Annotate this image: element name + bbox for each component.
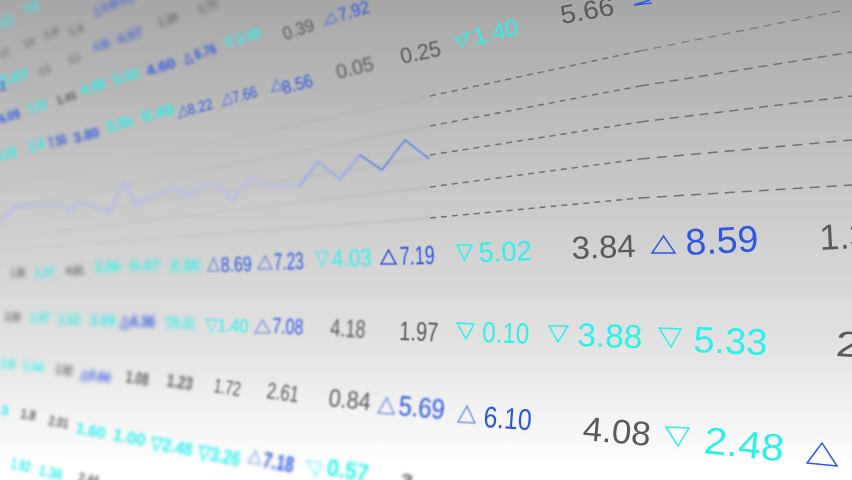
values near chart, mildly blurred: 8.56: [280, 71, 315, 98]
faint left guide lines: [0, 97, 430, 250]
bottom rows, blurred: 7.18: [261, 447, 296, 477]
row: values from 2.48 leftwards: 1.44: [22, 357, 45, 375]
top rows, distant and blurred: [0, 0, 220, 79]
row ending in 0.05, blurred part: [0, 66, 176, 165]
top rows, distant and blurred: 4.07: [115, 24, 144, 47]
row: values from 5.33 leftwards: [5, 309, 852, 365]
row ending in 1.40, blurred part: [0, 24, 262, 127]
top rows, distant and blurred: 1.6: [22, 36, 36, 51]
row: values from 5.33 leftwards: 1.52: [58, 311, 80, 329]
values near chart, mildly blurred: [179, 0, 376, 119]
row: values from 2.48 leftwards: 0.84: [327, 384, 372, 416]
row: values from 5.33 leftwards: 3.09: [90, 312, 115, 330]
row ending in 1.40, blurred part: 3.10: [26, 96, 49, 117]
row: values from 5.33 leftwards: △4.36: [119, 313, 156, 331]
top rows, distant and blurred: 1.9: [42, 25, 60, 42]
values near chart, mildly blurred: 0.05: [334, 53, 376, 84]
row: values from 2.48 leftwards: 1.92: [55, 360, 74, 379]
row: values from 2.48 leftwards: 6.10: [483, 401, 533, 437]
row ending in 0.05, blurred part: 7.50: [47, 131, 68, 151]
row: values from 2.48 leftwards: 5.69: [397, 390, 446, 425]
top rows, distant and blurred: 2.1: [67, 51, 82, 67]
top rows, distant and blurred: 4.66: [91, 35, 112, 55]
values near chart, mildly blurred: 0.39: [280, 15, 317, 44]
top rows, distant and blurred: 1.28: [156, 9, 180, 30]
top row values: [398, 0, 652, 69]
row: values from 8.59 leftwards: 8.59: [684, 218, 759, 263]
row ending in 1.40, blurred part: 1.45: [55, 88, 78, 108]
row: values from 8.59 leftwards: 8.69: [220, 253, 252, 277]
row: values from 8.59 leftwards: 5.02: [478, 235, 532, 268]
row: values from 8.59 leftwards: 4.81: [66, 263, 84, 278]
values near chart, mildly blurred: 7.66: [231, 84, 259, 107]
row: values from 2.48 leftwards: [0, 355, 837, 470]
row: values from 8.59 leftwards: 7.19: [399, 240, 435, 271]
top row values: 0.25: [398, 36, 443, 69]
row ending in 0.05, blurred part: 2.4: [27, 135, 47, 156]
values near chart, mildly blurred: 8.22: [186, 96, 215, 119]
row: values from 8.59 leftwards: 2.35: [170, 257, 200, 275]
dashed forecast lines: [430, 10, 852, 218]
row: values from 5.33 leftwards: ▽0.31: [164, 315, 196, 333]
row: values from 5.33 leftwards: 7.08: [272, 313, 304, 340]
bottom rows, blurred: [0, 402, 414, 480]
row: values from 5.33 leftwards: 3.88: [577, 316, 643, 355]
row: values from 8.59 leftwards: 0.47: [130, 257, 160, 275]
row: values from 2.48 leftwards: 4.08: [581, 410, 652, 454]
bottom rows, blurred: ▽3.26: [195, 441, 242, 471]
bottom rows, blurred: 1.60: [74, 420, 107, 443]
row ending in 0.05, blurred part: 3.80: [72, 124, 101, 146]
row ending in 1.40, blurred part: △ 6.76: [180, 40, 218, 66]
bottom rows, blurred: 1.00: [111, 425, 147, 450]
row: values from 5.33 leftwards: ▽1.40: [205, 315, 249, 337]
row: values from 2.48 leftwards: 1.23: [165, 370, 194, 394]
row: values from 8.59 leftwards: 3.84: [571, 228, 636, 266]
bottom rows, blurred: 2.01: [47, 412, 70, 431]
row: values from 2.48 leftwards: 1.72: [212, 375, 242, 401]
top rows, distant and blurred: 1.4: [67, 22, 86, 39]
row: values from 5.33 leftwards: 5.33: [693, 319, 768, 363]
row ending in 1.40, blurred part: 4.88: [78, 75, 108, 98]
line chart: [0, 140, 428, 222]
row: values from 8.59 leftwards: 3.09: [95, 259, 120, 276]
row: values from 2.48 leftwards: 2.30: [0, 355, 17, 372]
row ending in 0.05, blurred part: 0.49: [140, 101, 176, 126]
bottom rows, blurred: 1.8: [19, 405, 37, 424]
row: values from 5.33 leftwards: 1.97: [30, 309, 51, 326]
top rows, distant and blurred: 1.5: [37, 63, 52, 79]
row: values from 5.33 leftwards: 2.09: [5, 309, 20, 325]
row ending in 1.40, blurred part: 4.60: [144, 54, 178, 79]
row: values from 2.48 leftwards: △0.84: [79, 365, 112, 386]
row: values from 8.59 leftwards: 1.36: [11, 265, 25, 280]
row: values from 8.59 leftwards: [11, 213, 852, 280]
row: values from 2.48 leftwards: 2.48: [702, 420, 786, 470]
row: values from 2.48 leftwards: 2.61: [265, 377, 301, 407]
bottom rows, blurred: 1.92: [9, 455, 32, 476]
row: values from 5.33 leftwards: 4.18: [330, 314, 366, 344]
row: values from 8.59 leftwards: 4.03: [331, 245, 372, 273]
row: values from 5.33 leftwards: 1.97: [399, 316, 439, 347]
row ending in 1.40, blurred part: 5.02: [111, 64, 142, 88]
row: values from 8.59 leftwards: 1.27: [35, 265, 55, 280]
bottom rows, blurred: ▽2.48: [148, 432, 194, 460]
row: values from 2.48 leftwards: 1.08: [124, 367, 150, 390]
top row values: 1.40: [470, 14, 521, 51]
row: values from 8.59 leftwards: 7.23: [273, 248, 304, 276]
row ending in 1.40, blurred part: ▽ 2.18: [221, 24, 262, 51]
row: values from 5.33 leftwards: 0.10: [482, 317, 530, 351]
row ending in 0.05, blurred part: 3.55: [105, 113, 134, 136]
